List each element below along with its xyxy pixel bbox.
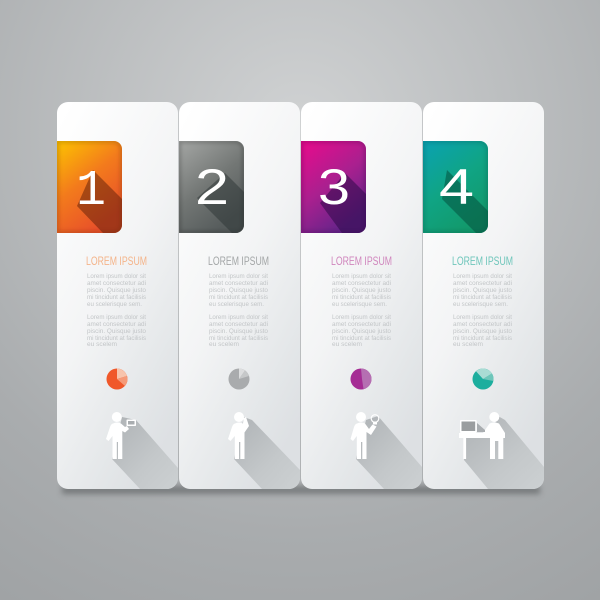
body text 3: Lorem ipsum dolor sit	[332, 274, 391, 280]
body text 1: piscin. Quisque justo	[87, 288, 147, 294]
body text 3: eu scelerisque sem.	[332, 302, 387, 308]
body text 3: piscin. Quisque justo	[332, 288, 392, 294]
panel: step 4	[423, 102, 544, 489]
icon: person on phone	[228, 412, 249, 459]
body text 4: amet consectetur adi	[453, 322, 512, 328]
heading 2: LOREM IPSUM	[208, 254, 269, 268]
pie chart 2	[228, 368, 250, 390]
body text 2: eu scelem	[209, 342, 239, 348]
icon: person with tablet	[106, 412, 136, 459]
body text 4	[453, 274, 513, 348]
heading 3: LOREM IPSUM	[331, 254, 392, 268]
long shadow: person 4	[464, 416, 544, 489]
body text 2	[209, 274, 269, 348]
body text 1: amet consectetur adi	[87, 281, 146, 287]
number tab 2: 2	[195, 159, 229, 215]
pie chart 3	[350, 368, 372, 390]
body text 3: amet consectetur adi	[332, 281, 391, 287]
body text 2: eu scelerisque sem.	[209, 302, 264, 308]
heading 4: LOREM IPSUM	[452, 254, 513, 268]
body text 2: piscin. Quisque justo	[209, 288, 269, 294]
body text 4: mi tincidunt at facilisis	[453, 295, 512, 301]
number tab 2	[179, 141, 244, 233]
body text 3: amet consectetur adi	[332, 322, 391, 328]
number tab 1	[57, 141, 122, 233]
heading 1: LOREM IPSUM	[86, 254, 147, 268]
body text 3	[332, 274, 392, 348]
panel: step 1	[57, 102, 178, 489]
body text 1: amet consectetur adi	[87, 322, 146, 328]
pie chart 4	[472, 368, 494, 390]
body text 1: eu scelerisque sem.	[87, 302, 142, 308]
number tab 4	[423, 141, 488, 233]
number tab 3	[301, 141, 366, 233]
body text 3: piscin. Quisque justo	[332, 329, 392, 335]
number tab 4: 4	[439, 159, 474, 215]
body text 1: mi tincidunt at facilisis	[87, 295, 146, 301]
body text 2: mi tincidunt at facilisis	[209, 295, 268, 301]
body text 1: Lorem ipsum dolor sit	[87, 315, 146, 321]
body text 2: mi tincidunt at facilisis	[209, 336, 268, 342]
body text 3: mi tincidunt at facilisis	[332, 336, 391, 342]
body text 4: mi tincidunt at facilisis	[453, 336, 512, 342]
body text 3: Lorem ipsum dolor sit	[332, 315, 391, 321]
body text 4: eu scelem	[453, 342, 483, 348]
drop shadow under cards	[62, 486, 540, 494]
body text 1: piscin. Quisque justo	[87, 329, 147, 335]
long shadow: person 1	[112, 417, 178, 489]
body text 4: amet consectetur adi	[453, 281, 512, 287]
body text 1: mi tincidunt at facilisis	[87, 336, 146, 342]
body text 1: eu scelem	[87, 342, 117, 348]
body text 2: Lorem ipsum dolor sit	[209, 274, 268, 280]
body text 4: piscin. Quisque justo	[453, 329, 513, 335]
body text 4: Lorem ipsum dolor sit	[453, 315, 512, 321]
body text 2: piscin. Quisque justo	[209, 329, 269, 335]
body text 4: piscin. Quisque justo	[453, 288, 513, 294]
number tab 3: 3	[318, 159, 350, 215]
body text 2: amet consectetur adi	[209, 322, 268, 328]
body text 4: eu scelerisque sem.	[453, 302, 508, 308]
body text 1	[87, 274, 147, 348]
number tab 1: 1	[76, 163, 106, 220]
body text 2: Lorem ipsum dolor sit	[209, 315, 268, 321]
pie chart 1	[106, 368, 128, 390]
long shadow: person 2	[234, 417, 300, 489]
body text 4: Lorem ipsum dolor sit	[453, 274, 512, 280]
body text 1: Lorem ipsum dolor sit	[87, 274, 146, 280]
body text 3: eu scelem	[332, 342, 362, 348]
panel: step 2	[179, 102, 300, 489]
body text 2: amet consectetur adi	[209, 281, 268, 287]
long shadow: person 3	[356, 416, 422, 489]
icon: person at desk	[459, 412, 505, 459]
body text 3: mi tincidunt at facilisis	[332, 295, 391, 301]
icon: person with lightbulb	[350, 412, 379, 459]
panel: step 3	[301, 102, 422, 489]
